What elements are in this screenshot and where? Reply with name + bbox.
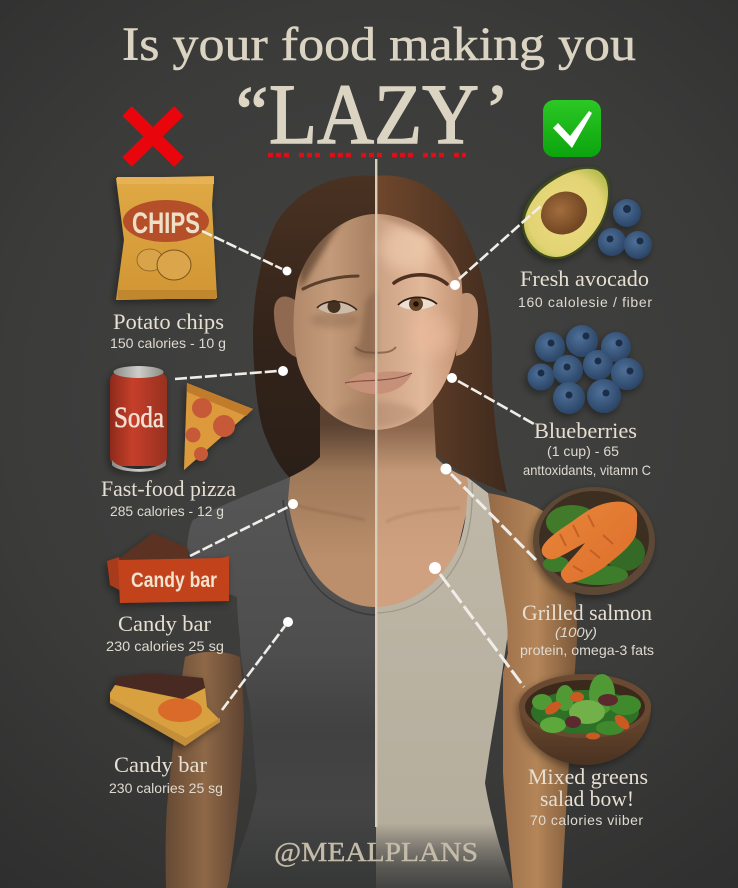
- nutrition: 230 calories 25 sg: [106, 638, 224, 654]
- left hair: [253, 175, 376, 478]
- title: “: [236, 72, 268, 152]
- food: soda and pizza: [101, 366, 253, 519]
- food: potato chips: [110, 176, 226, 351]
- nutrition: 150 calories - 10 g: [110, 335, 226, 351]
- label: Mixed greens: [528, 764, 648, 789]
- icon: soda can: Soda: [114, 401, 164, 434]
- connector: avocado: [450, 205, 542, 290]
- icon: pizza slice: [184, 383, 253, 470]
- icon: candy bar: Candy bar: [131, 569, 217, 592]
- icon: soda can: [110, 366, 167, 472]
- eyebrows: [303, 275, 447, 289]
- nutrition: anttoxidants, vitamn C: [523, 462, 651, 478]
- nutrition: 285 calories - 12 g: [110, 503, 224, 519]
- serving: (1 cup) - 65: [547, 443, 619, 459]
- connector: chips: [202, 231, 292, 276]
- right beige top: [376, 477, 513, 888]
- icon: salmon bowl: [533, 487, 655, 595]
- icon: green check: [543, 100, 601, 157]
- connector: blueberries: [447, 373, 534, 424]
- label: Potato chips: [113, 309, 224, 334]
- right arm and shoulder: [488, 493, 577, 888]
- nutrition: 70 calories viiber: [530, 812, 643, 828]
- eyes: [317, 297, 437, 314]
- ears: [274, 293, 478, 358]
- connector: salad: [429, 562, 524, 687]
- label: [528, 764, 648, 811]
- serving: (100y): [555, 624, 597, 640]
- icon: layered candy slice: [110, 673, 220, 746]
- connector: pizza: [175, 366, 288, 379]
- left neck and chest: [286, 400, 376, 612]
- nutrition: 230 calories 25 sg: [109, 780, 223, 796]
- food: candy bar slice: [109, 673, 223, 796]
- icon: red cross: [127, 111, 179, 162]
- nutrition: 160 calolesie / fiber: [518, 294, 652, 310]
- icon: avocado: [522, 167, 610, 259]
- label: Fresh avocado: [520, 266, 649, 291]
- woman split portrait: [166, 175, 577, 888]
- title: LAZY: [269, 66, 479, 162]
- icon: blueberries: [598, 199, 652, 259]
- label: salad bow!: [540, 786, 634, 811]
- title: ’: [485, 70, 509, 150]
- center divider line: [375, 159, 377, 827]
- right neck and chest: [376, 400, 467, 612]
- right hair: [376, 175, 507, 493]
- label: Fast-food pizza: [101, 476, 236, 501]
- label: Grilled salmon: [522, 600, 652, 625]
- connectors: [175, 205, 542, 710]
- nose: [355, 347, 396, 353]
- left grey top: [187, 477, 376, 888]
- red dotted underline: [268, 153, 466, 157]
- title: Is your food making you: [122, 18, 636, 71]
- mouth: [345, 371, 412, 394]
- collarbone highlights: [295, 505, 460, 522]
- label: Candy bar: [118, 611, 212, 636]
- icon: chips bag: CHIPS: [132, 207, 200, 240]
- connector: salmon: [440, 464, 536, 560]
- food: blueberries: [523, 325, 651, 478]
- connector: candy bar: [190, 499, 298, 556]
- title: [122, 18, 636, 162]
- icon: chips bag: [116, 176, 217, 300]
- icon: salad bowl: [519, 674, 651, 765]
- food: candy bar: [106, 533, 229, 654]
- food: salad bowl: [519, 674, 651, 828]
- left arm: [166, 652, 244, 888]
- label: Blueberries: [534, 418, 637, 443]
- label: Candy bar: [114, 752, 208, 777]
- handle: @MEALPLANS: [274, 837, 478, 867]
- face: [294, 214, 462, 430]
- connector: candy slice: [222, 617, 293, 710]
- food: grilled salmon: [520, 487, 655, 658]
- icon: blueberry cluster: [528, 325, 643, 414]
- food: avocado: [518, 167, 652, 310]
- nutrition: protein, omega-3 fats: [520, 642, 654, 658]
